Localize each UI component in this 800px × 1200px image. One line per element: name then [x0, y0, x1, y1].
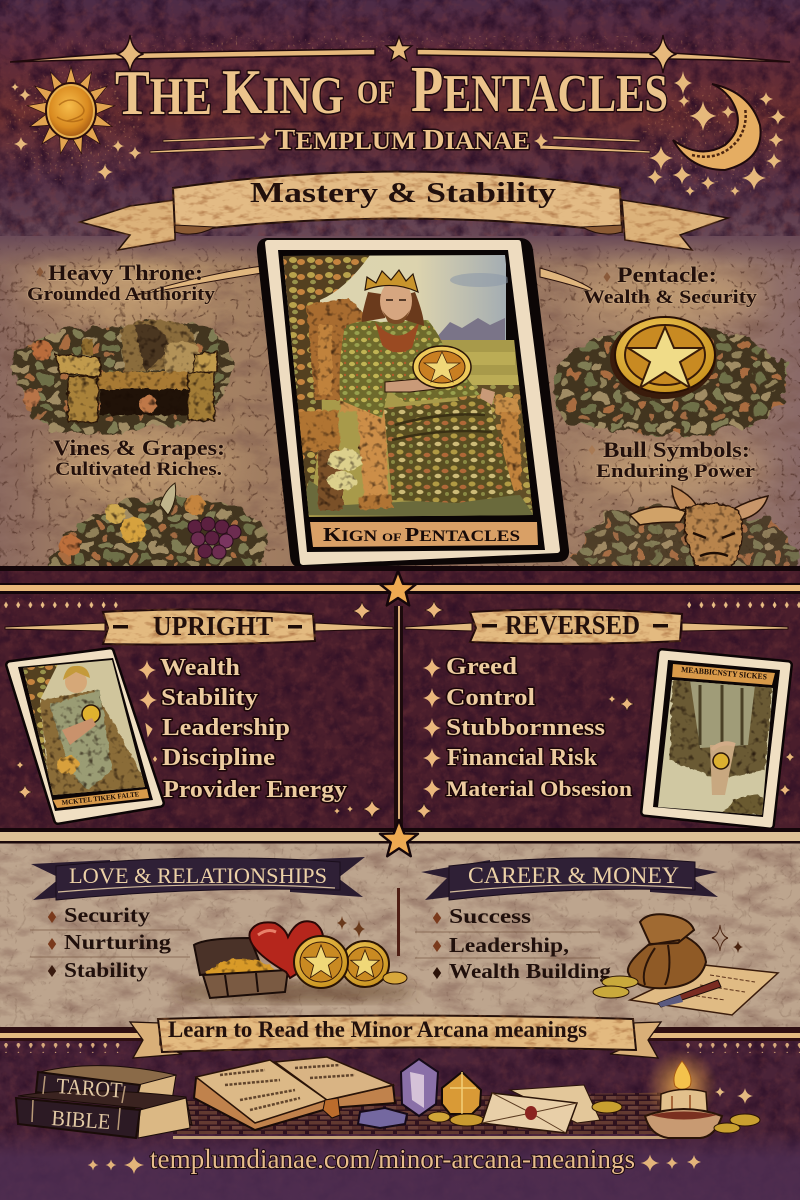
middle divider: [0, 828, 800, 844]
love list: Security: [64, 903, 151, 927]
icon: pentacle and foliage: [553, 317, 787, 435]
candle: [645, 1049, 760, 1138]
reversed list: Material Obsesion: [446, 776, 632, 801]
card title plate: [310, 522, 538, 547]
label: bull symbols: Bull Symbols:: [603, 437, 750, 462]
love list: Stability: [64, 958, 149, 982]
envelope and letter: [482, 1085, 622, 1133]
upright list: Provider Energy: [163, 777, 347, 803]
side ribbon right: [540, 268, 592, 291]
star: upper divider: [380, 571, 416, 605]
side ribbon left: [132, 266, 262, 296]
vertical divider: [394, 606, 403, 832]
upright card plate: [53, 789, 149, 808]
career list: Leadership,: [449, 933, 569, 957]
panel: header: [0, 0, 800, 240]
label: heavy throne: Heavy Throne:: [48, 260, 203, 285]
robe skirt: [384, 398, 515, 503]
career list: [415, 904, 612, 983]
banner: mastery and stability: [80, 172, 728, 250]
label: heavy throne: Grounded Authority: [27, 284, 216, 305]
reversed card plate: [672, 664, 775, 685]
subtitle: [150, 124, 650, 156]
reversed banner: REVERSED: [505, 610, 640, 640]
career list: Success: [449, 904, 531, 928]
label: vines and grapes: Vines & Grapes:: [53, 435, 225, 460]
reversed card: MEABBICNSTY SICKES: [681, 665, 768, 682]
upright list: Stability: [161, 685, 258, 711]
top divider: [0, 566, 800, 594]
career ribbon: [421, 858, 718, 900]
title: THE: [115, 57, 212, 128]
reversed list: Stubbornness: [446, 715, 605, 741]
crown: [365, 270, 418, 292]
upright card: [10, 652, 160, 820]
panel: footer: [0, 1016, 800, 1200]
career list: Wealth Building: [449, 959, 612, 983]
light patches behind labels: [20, 262, 767, 494]
love ribbon: LOVE & RELATIONSHIPS: [69, 863, 327, 888]
reversed card scene: [658, 680, 773, 815]
books: tarot and bible: [16, 1066, 192, 1138]
card pentacle: [413, 346, 471, 388]
career ribbon: CAREER & MONEY: [468, 863, 679, 888]
banner: mastery and stability: Mastery & Stability: [250, 177, 557, 209]
label: heavy throne: [27, 260, 216, 305]
upright list: Wealth: [160, 655, 240, 681]
main tarot card: [257, 238, 569, 568]
open book: [194, 1057, 395, 1130]
icon: sun: [27, 67, 115, 155]
label: pentacle: Pentacle:: [617, 262, 717, 287]
upright card scene: [23, 660, 145, 795]
card scene: [283, 255, 535, 520]
books: tarot and bible: TAROT: [56, 1073, 124, 1103]
label: pentacle: Wealth & Security: [583, 287, 758, 308]
upright list: Leadership: [162, 715, 290, 741]
love list: Nurturing: [64, 930, 172, 954]
upright banner: [5, 609, 393, 645]
scroll banner: [130, 1016, 661, 1058]
reversed list: Greed: [446, 654, 518, 680]
shelf: [173, 1092, 700, 1139]
title: KING: [222, 56, 344, 127]
reversed card: [645, 653, 788, 825]
subtitle: TEMPLUM DIANAE: [275, 124, 530, 156]
label: bull symbols: [588, 437, 756, 482]
label: bull symbols: Enduring Power: [596, 461, 756, 482]
upright card: MCKTEL TIKEK FALTE: [61, 790, 140, 807]
reversed banner: [405, 609, 788, 644]
reversed list: Control: [446, 685, 535, 711]
face: [380, 286, 412, 320]
icon: money bag, letter and pen: [593, 914, 778, 1015]
upright banner: UPRIGHT: [153, 611, 273, 641]
panel: symbols area: [0, 236, 800, 578]
section sparkles: [16, 600, 795, 819]
hands: [385, 377, 445, 392]
torso and sleeve: [340, 320, 480, 418]
sun sparkles: [11, 83, 142, 180]
star: lower divider: [380, 820, 418, 856]
label: pentacle: [583, 262, 758, 308]
icon: chest, heart and coins: [175, 916, 415, 1003]
title: PENTACLES: [411, 53, 668, 126]
icon: bench and foliage: [14, 320, 231, 432]
flowers: [327, 449, 362, 490]
card title: KIGN OF PENTACLES: [323, 524, 520, 546]
crystals: [358, 1059, 484, 1128]
upright list: [138, 655, 347, 803]
hair: [362, 292, 424, 326]
vertical divider small: [397, 888, 400, 956]
panel: upright and reversed: [0, 566, 800, 832]
icon: crescent moon: [673, 84, 761, 170]
label: vines and grapes: Cultivated Riches.: [55, 459, 222, 480]
love list: [30, 903, 190, 982]
scroll banner: Learn to Read the Minor Arcana meanings: [168, 1017, 587, 1042]
website url: templumdianae.com/minor-arcana-meanings: [150, 1144, 635, 1174]
books: tarot and bible: BIBLE: [51, 1105, 111, 1134]
moon sparkles: [647, 71, 786, 196]
love ribbon: [31, 857, 365, 900]
label: vines and grapes: [53, 435, 225, 480]
icon: vines and grapes: [48, 483, 264, 578]
title: OF: [357, 75, 395, 111]
upright list: Discipline: [162, 745, 275, 771]
title: [115, 53, 668, 128]
panel: love and career: [0, 828, 800, 1030]
reversed list: Financial Risk: [447, 745, 598, 771]
icon: bull and foliage: [575, 486, 800, 578]
throne: [298, 298, 522, 510]
top ornament bar: [10, 35, 790, 73]
reversed list: [423, 654, 632, 801]
